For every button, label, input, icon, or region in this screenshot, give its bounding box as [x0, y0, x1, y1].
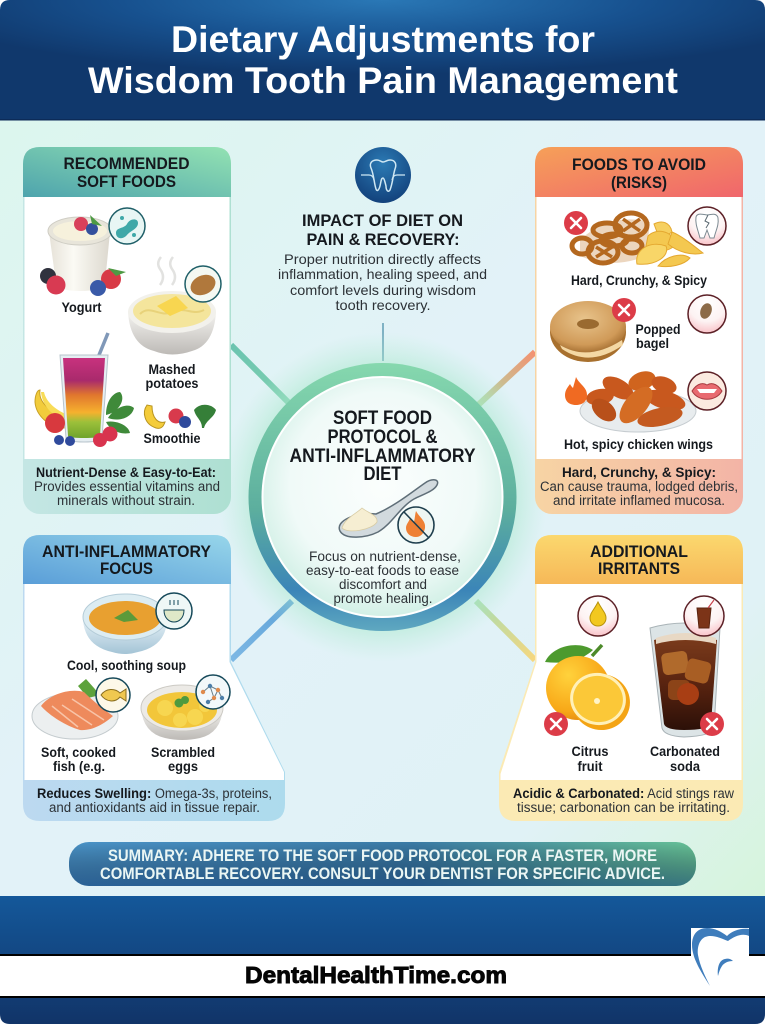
hub title: SOFT FOOD	[333, 408, 432, 429]
label: popped bagel: Popped	[636, 322, 680, 337]
irritant text: tissue; carbonation can be irritating.	[517, 800, 730, 815]
heading	[64, 154, 190, 191]
panel: recommended soft foods	[23, 147, 231, 514]
smoothie	[35, 333, 134, 447]
icon: avoid badge	[612, 298, 636, 322]
heading: (RISKS)	[611, 173, 667, 192]
icon: tooth badge	[355, 147, 411, 203]
impact paragraph: comfort levels during wisdom	[290, 282, 476, 298]
hub title: ANTI-INFLAMMATORY	[290, 446, 476, 467]
swelling text: and antioxidants aid in tissue repair.	[49, 800, 260, 815]
label: fish: fish (e.g.	[53, 759, 105, 774]
label: citrus: Citrus	[572, 744, 608, 759]
icon: no fire	[398, 507, 434, 543]
bagel	[550, 301, 626, 362]
risk text: and irritate inflamed mucosa.	[553, 493, 725, 508]
impact paragraph: tooth recovery.	[336, 297, 430, 313]
icon: avoid badge	[544, 712, 568, 736]
heading: ANTI-INFLAMMATORY	[42, 542, 212, 561]
label: eggs	[151, 745, 215, 774]
icon: soup	[156, 593, 192, 629]
risk text	[540, 465, 738, 508]
carbonated soda	[650, 623, 720, 737]
website url: DentalHealthTime.com	[245, 962, 507, 988]
yogurt	[40, 215, 126, 296]
icon: probiotic	[109, 208, 145, 244]
logo: tooth	[691, 928, 749, 986]
page background	[0, 120, 765, 896]
heading: IRRITANTS	[598, 559, 680, 578]
summary pill: SUMMARY: ADHERE TO THE SOFT FOOD PROTOCOL FOR A FASTER, MORE	[108, 846, 657, 865]
chicken wings	[580, 368, 696, 432]
benefit text: minerals without strain.	[57, 493, 195, 508]
label: fish	[41, 745, 116, 774]
label: fish: Soft, cooked	[41, 745, 116, 760]
summary pill: COMFORTABLE RECOVERY. CONSULT YOUR DENTIST FOR SPECIFIC ADVICE.	[100, 864, 665, 883]
benefit text: Nutrient-Dense & Easy-to-Eat:	[36, 465, 216, 480]
panel: foods to avoid	[535, 147, 743, 514]
icon: lodged seed	[688, 295, 726, 333]
benefit text	[34, 465, 220, 508]
title banner: Dietary Adjustments for	[171, 19, 595, 60]
hub body text: promote healing.	[334, 591, 432, 606]
label: eggs: Scrambled	[151, 745, 215, 760]
heading	[42, 542, 212, 578]
connector lines	[231, 323, 535, 660]
icon: avoid badge	[564, 211, 588, 235]
footer band	[0, 896, 765, 1024]
hub title: PROTOCOL &	[328, 427, 438, 448]
label: smoothie: Smoothie	[144, 431, 201, 446]
impact heading: PAIN & RECOVERY:	[306, 230, 460, 249]
icon: soda irritation	[684, 596, 724, 636]
icon: acid drop	[578, 596, 618, 636]
irritant text	[513, 786, 734, 815]
icon: irritated mouth	[688, 372, 726, 410]
label: soda	[650, 744, 720, 774]
label: popped bagel: bagel	[636, 336, 669, 351]
central hub	[218, 332, 548, 662]
hub body text: discomfort and	[339, 577, 427, 592]
smoothie ingredient icons	[144, 405, 216, 428]
label: mashed potatoes: potatoes	[146, 376, 198, 391]
impact heading	[302, 211, 463, 249]
heading: RECOMMENDED	[64, 154, 190, 173]
label: citrus: fruit	[578, 759, 603, 774]
label: mashed potatoes	[146, 362, 198, 391]
heading: FOODS TO AVOID	[572, 155, 706, 174]
pretzels and chips	[572, 213, 703, 267]
label: popped bagel	[636, 322, 680, 351]
impact text block	[278, 211, 487, 313]
hub body text: easy-to-eat foods to ease	[306, 563, 459, 578]
icon: cracked tooth	[688, 207, 726, 245]
icon: spoon	[339, 480, 438, 537]
title banner	[0, 0, 765, 120]
swelling text: Reduces Swelling: Omega-3s, proteins,	[37, 786, 272, 801]
icon: antioxidant molecule	[196, 675, 230, 709]
benefit text: Provides essential vitamins and	[34, 479, 220, 494]
icon: fish	[96, 678, 130, 712]
irritant text: Acidic & Carbonated: Acid stings raw	[513, 786, 734, 801]
icon: avoid badge	[700, 712, 724, 736]
hub title: DIET	[364, 464, 402, 485]
heading: FOCUS	[100, 559, 153, 578]
label: citrus	[572, 744, 608, 774]
heading: ADDITIONAL	[590, 542, 688, 561]
label: eggs: eggs	[168, 759, 198, 774]
citrus fruit	[545, 645, 635, 735]
mashed potatoes	[128, 257, 216, 354]
label: soda: Carbonated	[650, 744, 720, 759]
risk text: Can cause trauma, lodged debris,	[540, 479, 738, 494]
panel: anti-inflammatory focus	[23, 535, 285, 821]
hub body text: Focus on nutrient-dense,	[309, 549, 461, 564]
heading: SOFT FOODS	[77, 172, 176, 191]
label: yogurt: Yogurt	[62, 300, 102, 315]
label: soda: soda	[670, 759, 700, 774]
salmon plate	[32, 679, 118, 739]
label: mashed potatoes: Mashed	[148, 362, 196, 377]
risk text: Hard, Crunchy, & Spicy:	[562, 465, 716, 480]
label: soup: Cool, soothing soup	[67, 658, 186, 673]
panel: additional irritants	[499, 535, 743, 821]
hub title	[290, 408, 476, 485]
soup bowl	[83, 594, 167, 654]
scrambled eggs	[141, 685, 223, 740]
label: chicken wings: Hot, spicy chicken wings	[564, 437, 713, 452]
hub body text	[306, 549, 461, 606]
title banner: Wisdom Tooth Pain Management	[88, 60, 678, 101]
heading	[572, 155, 706, 192]
impact heading: IMPACT OF DIET ON	[302, 211, 463, 230]
icon: flame	[565, 377, 587, 405]
impact paragraph: inflammation, healing speed, and	[278, 266, 487, 282]
label: hard crunchy spicy: Hard, Crunchy, & Spicy	[571, 273, 707, 288]
impact paragraph: Proper nutrition directly affects	[284, 251, 481, 267]
impact paragraph	[278, 251, 487, 313]
swelling text	[37, 786, 272, 815]
heading	[590, 542, 688, 578]
summary pill	[69, 842, 696, 886]
icon: potato	[185, 266, 221, 302]
